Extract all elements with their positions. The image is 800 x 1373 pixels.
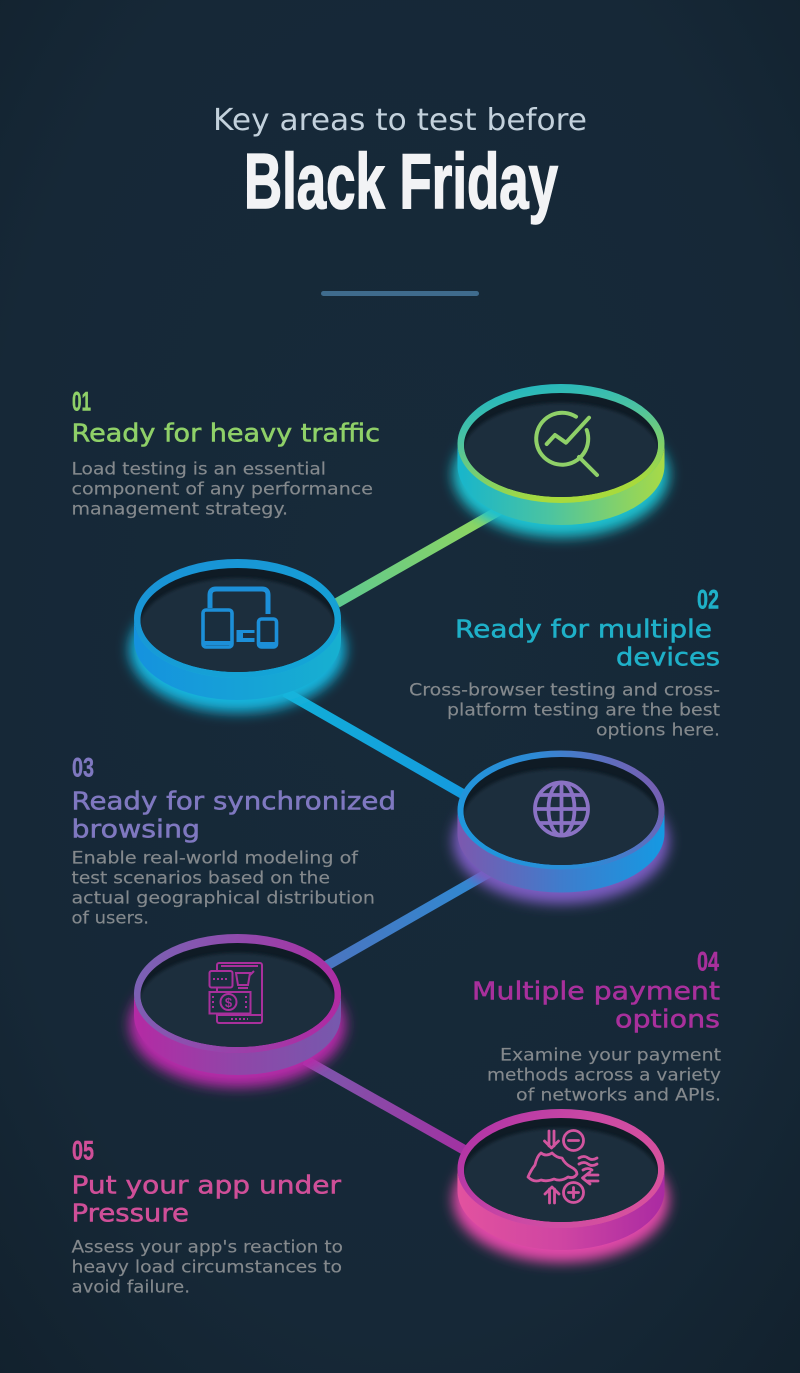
number 02: 02 [697, 584, 719, 614]
body 3 [72, 848, 375, 928]
body 5 [72, 1238, 343, 1298]
heading 3: browsing [72, 814, 200, 844]
subtitle: Key areas to test before [213, 103, 587, 138]
disk 5 [453, 1109, 669, 1262]
disk 2 rim [134, 559, 341, 678]
disk 4 glow [130, 962, 346, 1088]
disk 3 rim [458, 750, 664, 870]
heading 2 [455, 614, 720, 672]
heading 1: Ready for heavy traffic [72, 418, 380, 448]
body 3: test scenarios based on the [72, 868, 330, 888]
section 1 text [72, 386, 380, 520]
disk 1 glow [453, 412, 669, 538]
section 5 text [72, 1136, 343, 1298]
disk 1 [453, 384, 669, 538]
disk 2 [130, 559, 346, 712]
disk 5 glow [453, 1136, 669, 1262]
body 4: of networks and APIs. [516, 1086, 721, 1106]
heading 5: Pressure [72, 1198, 189, 1228]
connector line 2 [285, 692, 468, 797]
body 5: Assess your app's reaction to [72, 1238, 343, 1258]
disk 3 glow [453, 778, 669, 904]
heading 5 [72, 1170, 342, 1228]
body 3: actual geographical distribution [72, 888, 375, 908]
heading 2: Ready for multiple [455, 614, 712, 644]
body 3: Enable real-world modeling of [72, 848, 359, 868]
heading 2: devices [616, 642, 720, 672]
icon: globe [535, 782, 588, 836]
body 4: methods across a variety [487, 1066, 721, 1086]
heading 4: options [615, 1004, 720, 1034]
section 2 text [409, 584, 720, 740]
disk 4 [130, 934, 346, 1088]
body 2: options here. [596, 720, 720, 740]
body 4 [487, 1046, 721, 1106]
disk 4 side [134, 994, 341, 1075]
section 3 text [72, 752, 396, 928]
icon: devices [203, 589, 276, 647]
disk 3 side [458, 810, 664, 892]
section 4 text [472, 946, 721, 1106]
number 01: 01 [72, 386, 91, 416]
number 05: 05 [72, 1136, 94, 1166]
number 03: 03 [72, 752, 94, 782]
disk 5 side [458, 1168, 664, 1250]
disk 2 glow [130, 586, 346, 712]
dollar sign: $ [225, 995, 233, 1010]
connector line 1 [337, 510, 500, 603]
body 1 [72, 460, 373, 520]
heading 5: Put your app under [72, 1170, 342, 1200]
disk 5 rim [458, 1109, 664, 1228]
disk 4 rim [134, 934, 341, 1053]
body 5: heavy load circumstances to [72, 1258, 342, 1278]
heading 4: Multiple payment [472, 976, 720, 1006]
disk 3 [453, 750, 669, 904]
icon: payment [210, 963, 262, 1023]
icon: pressure cloud [528, 1130, 598, 1203]
disk 1 rim [458, 384, 664, 503]
body 2: Cross-browser testing and cross- [409, 680, 720, 700]
heading 3 [72, 786, 396, 844]
disk 1 side [458, 444, 664, 525]
body 1: Load testing is an essential [72, 460, 326, 480]
body 3: of users. [72, 908, 149, 928]
connector line 4 [305, 1060, 468, 1152]
title: Black Friday [244, 137, 558, 225]
body 5: avoid failure. [72, 1278, 190, 1298]
heading 4 [472, 976, 720, 1034]
body 2: platform testing are the best [447, 700, 720, 720]
disk 2 side [134, 618, 341, 700]
body 1: management strategy. [72, 500, 288, 520]
icon: chart magnifier [536, 413, 597, 475]
number 04: 04 [697, 946, 719, 976]
body 2 [409, 680, 720, 740]
connector line 3 [326, 872, 490, 966]
body 4: Examine your payment [500, 1046, 721, 1066]
body 1: component of any performance [72, 480, 373, 500]
divider [321, 291, 479, 296]
heading 3: Ready for synchronized [72, 786, 396, 816]
